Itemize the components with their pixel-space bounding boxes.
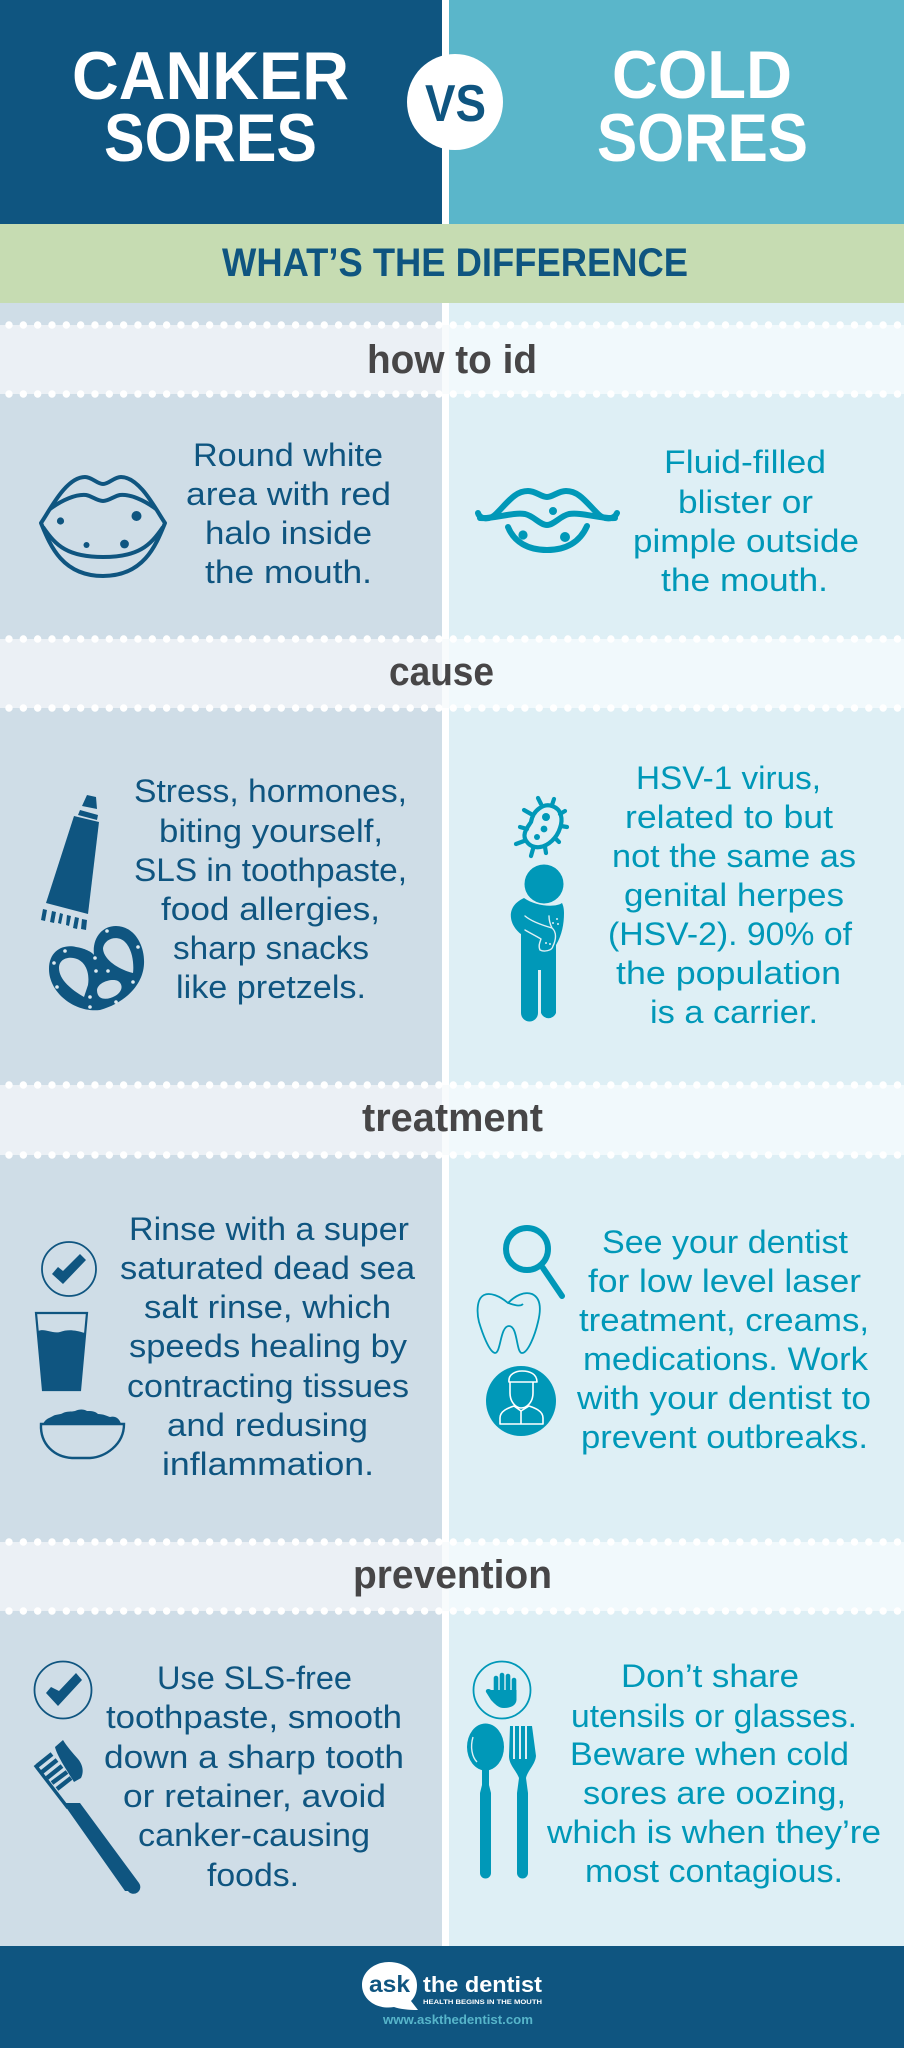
text: cold sore causes: genital herpes — [624, 877, 844, 913]
icon: lips with blisters — [478, 491, 617, 550]
text: cold sore causes: (HSV-2). 90% of — [608, 916, 852, 952]
text: cold sore identification: the mouth. — [661, 562, 828, 598]
heading: cause: cause — [389, 650, 494, 694]
text: canker treatment: saturated dead sea — [120, 1250, 415, 1286]
panel: cause, canker — [41, 773, 407, 1010]
text: canker causes: like pretzels. — [176, 969, 366, 1005]
text: canker treatment: Rinse with a super — [129, 1211, 409, 1247]
logo: ask the dentist: ask — [369, 1971, 410, 1997]
section band: treatment — [0, 1085, 904, 1155]
text: canker treatment: and redusing — [167, 1407, 368, 1443]
text: canker treatment: contracting tissues — [127, 1368, 409, 1404]
icon: stop hand circle — [474, 1662, 530, 1718]
text: cold sore causes: HSV-1 virus, — [636, 760, 821, 796]
text: cold sore prevention: Don’t share — [621, 1658, 799, 1694]
icon: spoon and fork — [467, 1724, 536, 1879]
text: cold sore treatment: treatment, creams, — [579, 1302, 869, 1338]
panel: treatment, canker — [36, 1211, 415, 1482]
text: cold sore prevention: Beware when cold — [570, 1736, 849, 1772]
icon: virus germ — [516, 798, 567, 856]
text: canker treatment: inflammation. — [162, 1446, 374, 1482]
text: canker treatment: speeds healing by — [129, 1328, 407, 1364]
text: canker identification: halo inside — [205, 515, 372, 551]
icon: pretzel — [49, 926, 144, 1010]
text: canker treatment: salt rinse, which — [144, 1289, 391, 1325]
icon: glass of water — [36, 1313, 87, 1391]
text: canker causes — [134, 773, 407, 1005]
icon: magnifying glass — [506, 1228, 562, 1296]
vs badge: VS — [425, 75, 486, 133]
text: cold sore causes — [608, 760, 856, 1030]
text: cold sore prevention — [546, 1658, 881, 1889]
text: cold sore treatment: with your dentist to — [576, 1380, 871, 1416]
heading: treatment: treatment — [362, 1096, 543, 1140]
text: cold sore prevention: utensils or glasses. — [571, 1698, 857, 1734]
panel: how to id, cold — [478, 444, 859, 598]
icon: toothbrush — [35, 1740, 140, 1894]
text: canker identification: the mouth. — [205, 554, 372, 590]
text: cold sore causes: the population — [616, 955, 841, 991]
title: canker sores — [72, 38, 349, 176]
text: canker causes: SLS in toothpaste, — [134, 852, 407, 888]
text: cold sore treatment — [576, 1224, 871, 1455]
cold column background — [449, 303, 904, 1946]
text: cold sore prevention: most contagious. — [585, 1853, 843, 1889]
text: canker causes: Stress, hormones, — [134, 773, 407, 809]
subtitle banner — [0, 224, 904, 303]
logo: ask the dentist: HEALTH BEGINS IN THE MOUTH — [423, 1999, 542, 2006]
text: canker prevention: canker-causing — [138, 1817, 370, 1853]
text: cold sore prevention: sores are oozing, — [583, 1775, 846, 1811]
panel: cause, cold — [511, 760, 856, 1030]
icon: tooth — [478, 1293, 540, 1353]
text: cold sore identification — [633, 444, 859, 598]
text: cold sore prevention: which is when they’re — [546, 1814, 881, 1850]
text: canker prevention: foods. — [207, 1857, 299, 1893]
text: canker identification — [186, 437, 391, 590]
website url: www.askthedentist.com — [382, 2012, 533, 2027]
text: cold sore treatment: See your dentist — [602, 1224, 848, 1260]
icon: person with sore — [511, 864, 564, 1022]
text: canker causes: food allergies, — [161, 891, 380, 927]
title: cold sores: SORES — [597, 100, 808, 176]
text: canker identification: area with red — [186, 476, 391, 512]
text: canker prevention: down a sharp tooth — [104, 1739, 404, 1775]
text: canker prevention: Use SLS-free — [157, 1660, 352, 1696]
text: cold sore treatment: prevent outbreaks. — [581, 1419, 868, 1455]
text: cold sore identification: pimple outside — [633, 523, 859, 559]
text: canker causes: biting yourself, — [159, 813, 383, 849]
icon: open mouth with sores — [41, 477, 165, 576]
title: canker sores: CANKER — [72, 38, 349, 114]
section band: how to id — [0, 325, 904, 394]
icon: bowl of salt — [41, 1410, 124, 1458]
icon: check mark circle — [42, 1242, 96, 1296]
header: canker sores — [0, 0, 442, 224]
section band: cause — [0, 639, 904, 708]
text: cold sore identification: Fluid-filled — [664, 444, 826, 480]
subtitle banner: WHAT’S THE DIFFERENCE — [222, 241, 688, 285]
panel: how to id, canker — [41, 437, 391, 590]
text: cold sore treatment: medications. Work — [583, 1341, 869, 1377]
text: cold sore identification: blister or — [678, 484, 813, 520]
section band: prevention — [0, 1542, 904, 1611]
text: cold sore treatment: for low level laser — [588, 1263, 861, 1299]
text: canker identification: Round white — [193, 437, 383, 473]
text: canker treatment — [120, 1211, 415, 1482]
title: cold sores: COLD — [612, 37, 792, 113]
canker column background — [0, 303, 442, 1946]
footer — [0, 1946, 904, 2048]
text: canker causes: sharp snacks — [173, 930, 369, 966]
header: cold sores — [449, 0, 904, 224]
text: cold sore causes: not the same as — [612, 838, 856, 874]
title: canker sores: SORES — [104, 100, 317, 176]
text: canker prevention: or retainer, avoid — [123, 1778, 386, 1814]
panel: prevention, cold — [467, 1658, 881, 1889]
text: canker prevention: toothpaste, smooth — [106, 1699, 402, 1735]
icon: dentist badge — [486, 1366, 556, 1436]
title: cold sores — [597, 37, 808, 176]
text: cold sore causes: related to but — [625, 799, 833, 835]
heading: prevention: prevention — [353, 1553, 552, 1597]
logo: ask the dentist: the dentist — [423, 1972, 543, 1997]
logo: ask the dentist — [362, 1962, 543, 2010]
text: canker prevention — [104, 1660, 404, 1893]
heading: how to id: how to id — [367, 338, 537, 382]
icon: check mark circle — [34, 1662, 92, 1718]
icon: toothpaste tube — [41, 795, 99, 930]
panel: prevention, canker — [34, 1660, 404, 1894]
vs badge — [407, 54, 503, 150]
panel: treatment, cold — [478, 1224, 871, 1455]
text: cold sore causes: is a carrier. — [650, 994, 818, 1030]
